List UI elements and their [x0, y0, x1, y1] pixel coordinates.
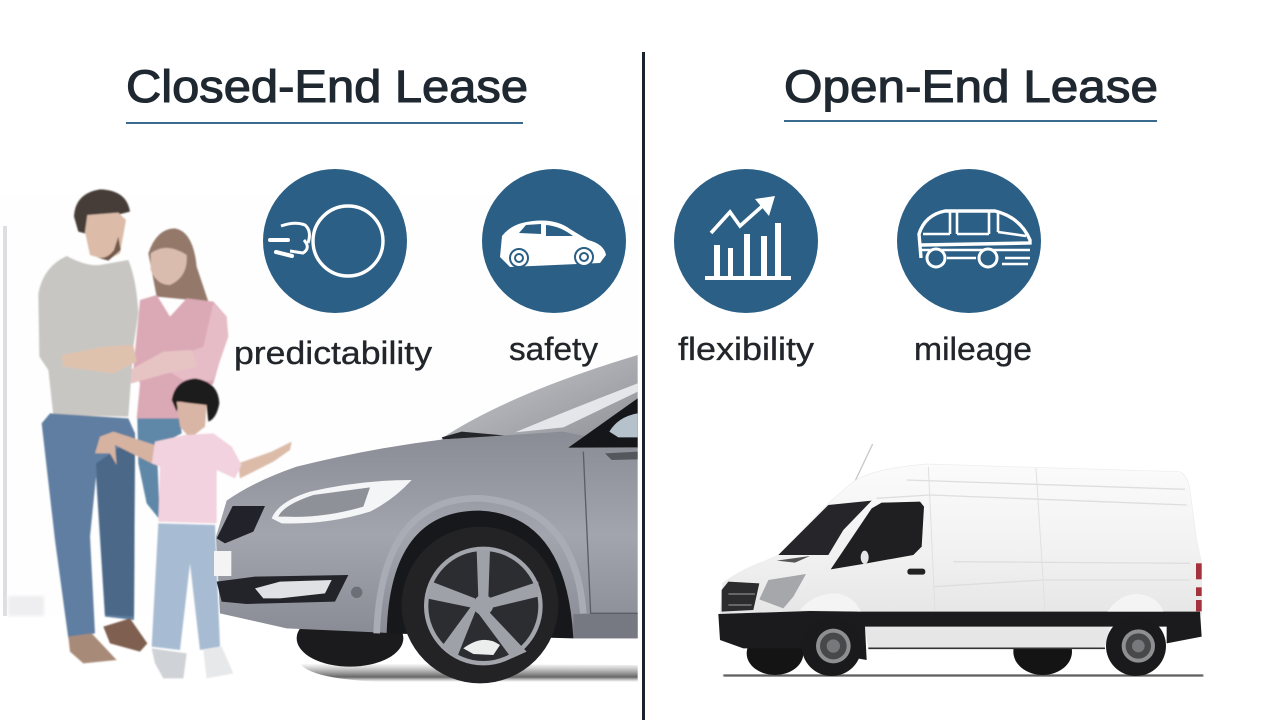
headlight [272, 480, 412, 524]
front wheel [802, 616, 862, 676]
windscreen [778, 501, 872, 555]
lower intake and fog lamp [217, 575, 348, 604]
lower sill [865, 627, 1110, 649]
far wheels [747, 632, 803, 675]
hood scoop [777, 556, 810, 563]
antenna [854, 444, 873, 483]
label: safety: safety [509, 331, 598, 367]
ground shadow [300, 663, 638, 682]
body panel lines [877, 480, 1190, 587]
icon: safety [482, 169, 626, 313]
heading: Closed-End Lease: Closed-End Lease [126, 61, 528, 112]
rear wheel [1106, 616, 1166, 676]
man [38, 189, 147, 663]
divider [642, 52, 645, 720]
headlight [759, 574, 806, 608]
panel: closed-end lease [0, 61, 638, 683]
wheel arch [387, 511, 573, 638]
icon: predictability [263, 169, 407, 313]
far wheel [297, 610, 403, 667]
heading: Open-End Lease: Open-End Lease [784, 61, 1158, 112]
grille [217, 506, 265, 543]
sill [573, 614, 638, 638]
alloy spokes [427, 550, 538, 658]
photo: white van [718, 444, 1203, 677]
body [720, 464, 1202, 615]
black rub strip and bumpers [718, 611, 1202, 660]
front tyre [402, 527, 558, 683]
number plate [214, 551, 231, 576]
icon: flexibility [674, 169, 818, 313]
roof and windscreen [442, 355, 638, 450]
photo: grey car [214, 355, 638, 683]
label: mileage: mileage [914, 331, 1032, 367]
woman [115, 228, 228, 520]
body [216, 432, 638, 638]
grille [722, 582, 759, 612]
icon: mileage [897, 169, 1041, 313]
photo background: showroom [0, 195, 638, 616]
ground shadow [723, 674, 1203, 677]
photo: family [38, 189, 292, 678]
child [95, 378, 292, 678]
side window [831, 502, 924, 569]
door line [583, 452, 638, 613]
label: predictability: predictability [234, 335, 432, 371]
door handle [907, 569, 925, 575]
tail lights [1196, 563, 1202, 579]
wheel arches [800, 593, 861, 612]
label: flexibility: flexibility [678, 331, 814, 367]
panel: open-end lease [674, 61, 1203, 677]
side window [568, 398, 638, 448]
fender lip [377, 498, 583, 633]
